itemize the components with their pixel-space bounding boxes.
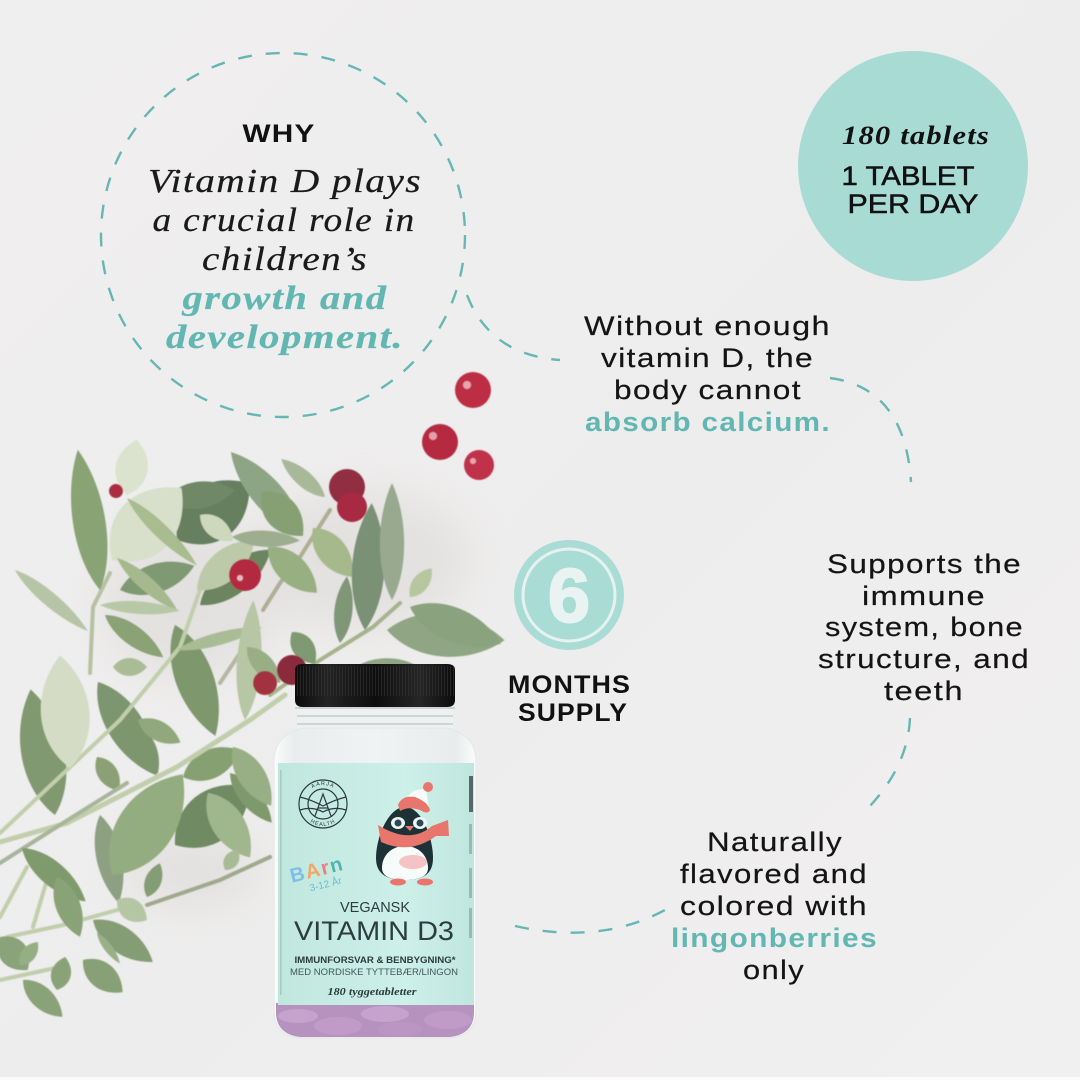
lingonberries text — [671, 827, 878, 985]
dosage circle: 180 tablets — [842, 121, 990, 150]
benefit text: IMMUNFORSVAR & BENBYGNING* — [294, 955, 456, 965]
immune text: Supports the — [827, 549, 1022, 579]
vitamin d3 text: VITAMIN D3 — [294, 916, 454, 946]
plant shadow — [100, 490, 470, 910]
months supply label: MONTHS — [508, 671, 631, 699]
side print — [280, 770, 473, 995]
vegansk text: VEGANSK — [340, 900, 410, 916]
why text — [148, 163, 422, 356]
why heading: WHY — [242, 120, 316, 148]
berries on plant — [109, 469, 367, 695]
immune text: system, bone — [825, 612, 1024, 642]
why dashed circle — [101, 53, 465, 417]
why text: Vitamin D plays — [148, 163, 422, 200]
calcium text: body cannot — [614, 375, 802, 405]
brand logo: AARJA — [312, 781, 334, 788]
brand logo — [298, 779, 348, 829]
brand logo: HEALTH — [310, 818, 334, 826]
calcium text — [584, 311, 831, 437]
jar label — [278, 763, 474, 1005]
jar body — [274, 728, 476, 1038]
vitamin d3 jar — [274, 664, 476, 1038]
loose berries — [422, 372, 494, 480]
lingonberries text: Naturally — [707, 827, 843, 857]
months supply label: SUPPLY — [518, 699, 628, 727]
immune text — [818, 549, 1030, 706]
calcium text: Without enough — [584, 311, 831, 341]
lingonberries text: only — [743, 955, 805, 985]
back leaves — [9, 461, 506, 906]
why text: growth and — [181, 280, 388, 317]
dosage circle: 1 TABLET — [842, 161, 974, 191]
immune text: immune — [862, 581, 986, 611]
six months badge: 6 — [548, 554, 590, 639]
immune text: structure, and — [818, 644, 1030, 674]
jar cap — [295, 664, 455, 707]
stems — [0, 510, 400, 980]
barn badge: 3-12 År — [308, 874, 344, 894]
why text: development. — [166, 319, 404, 356]
immune text: teeth — [884, 676, 964, 706]
why text: children’s — [202, 241, 368, 278]
jar neck — [295, 703, 455, 728]
calcium text: absorb calcium. — [585, 407, 831, 437]
months supply label — [508, 671, 631, 727]
lingonberry plant — [0, 437, 507, 1025]
tablet count: 180 tyggetabletter — [328, 987, 417, 998]
six months badge — [514, 540, 624, 650]
barn badge: BArn — [288, 853, 346, 888]
lingon text: MED NORDISKE TYTTEBÆR/LINGON — [290, 967, 458, 977]
lingonberries text: lingonberries — [671, 923, 878, 953]
gummy tablets — [276, 1003, 474, 1037]
lingonberries text: colored with — [680, 891, 868, 921]
lingonberries text: flavored and — [680, 859, 868, 889]
penguin — [376, 782, 449, 886]
connector arrows — [467, 295, 911, 933]
front leaves — [0, 437, 507, 1025]
dosage circle: PER DAY — [848, 189, 978, 219]
calcium text: vitamin D, the — [601, 343, 814, 373]
dosage circle — [798, 51, 1028, 281]
why text: a crucial role in — [152, 202, 416, 239]
